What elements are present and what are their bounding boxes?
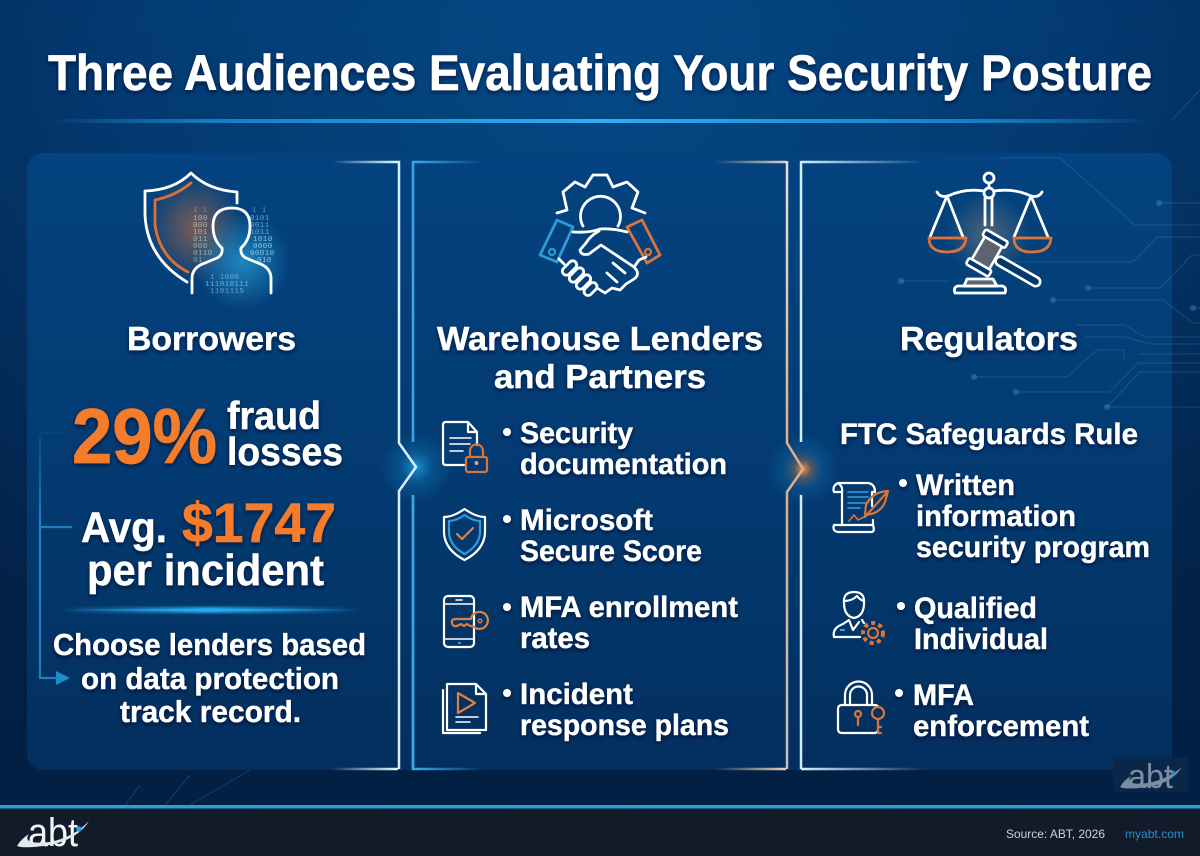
text: written information security program: Written — [916, 469, 1015, 502]
text: mfa enrollment rates — [503, 591, 738, 655]
text: mfa enforcement: enforcement — [913, 710, 1089, 743]
text: incident response plans — [503, 678, 729, 742]
flow connector arrow — [39, 433, 72, 685]
stat: average cost per incident: $1747 — [182, 491, 336, 554]
icon: shield and person with binary data: 0000 — [253, 243, 273, 251]
text: mfa enforcement: MFA — [913, 679, 974, 712]
icon: scroll and quill — [834, 483, 888, 532]
source credit: Source: ABT, 2026 — [1006, 828, 1105, 841]
panel frame: warehouse lenders — [413, 161, 803, 769]
panel: warehouse lenders and partners — [413, 161, 803, 769]
footer bar — [0, 805, 1200, 856]
item: mfa enforcement — [838, 679, 1089, 743]
text: security documentation: Security — [520, 417, 633, 450]
icon: shield and person with binary data: 111010111 — [205, 281, 249, 289]
panel: regulators — [801, 161, 1150, 769]
heading: borrowers: Borrowers — [127, 320, 296, 357]
panel frame: borrowers — [332, 161, 416, 769]
text: security documentation: documentation — [520, 448, 727, 481]
panel backdrop — [27, 153, 1172, 770]
text: written information security program — [899, 469, 1150, 564]
stat: average cost per incident: Avg. — [81, 504, 167, 552]
icon: person with gear — [834, 592, 883, 643]
item: incident response plans — [443, 678, 729, 742]
text: microsoft secure score: Microsoft — [520, 504, 653, 537]
icon: shield and person with binary data: 101 — [193, 229, 208, 237]
text: qualified individual: Qualified — [914, 592, 1037, 625]
text: incident response plans: response plans — [520, 709, 729, 742]
item: written information security program — [834, 469, 1150, 564]
icon: shield and person with binary data: 1 1 — [193, 207, 208, 215]
text: qualified individual — [897, 592, 1048, 656]
heading: warehouse lenders and partners: Warehouse Lenders — [437, 320, 763, 357]
item: mfa enrollment rates — [444, 591, 738, 655]
takeaway text — [53, 627, 366, 729]
subheading: ftc safeguards rule: FTC Safeguards Rule — [840, 418, 1138, 451]
icon: shield and person with binary data: 1011 — [250, 229, 270, 237]
icon: shield and person with binary data: 1 1000 — [210, 274, 240, 282]
icon: shield and person with binary data: 000 — [193, 243, 208, 251]
icon: shield and person with binary data: 0110 — [193, 250, 213, 258]
icon: gear and handshake — [540, 175, 660, 297]
stat divider — [58, 607, 362, 613]
icon: shield and person with binary data: 000 — [193, 222, 208, 230]
text: mfa enforcement — [895, 679, 1089, 743]
icon: shield and person with binary data: 00010 — [250, 250, 275, 258]
watermark logo: abt — [1128, 758, 1174, 796]
icon: shield and person with binary data: 011 — [193, 236, 208, 244]
stat: 29% fraud losses — [72, 392, 343, 480]
icon: phone with key — [444, 596, 488, 647]
item: security documentation — [443, 417, 727, 481]
stat: average cost per incident: per incident — [87, 546, 324, 595]
icon: shield and person with binary data: 0011 — [250, 222, 270, 230]
icon: shield and person with binary data: 100 — [193, 215, 208, 223]
text: incident response plans: Incident — [520, 678, 633, 711]
icon: shield and person with binary data: 01 — [193, 257, 203, 265]
stat: 29% fraud losses: losses — [227, 431, 343, 474]
icon: shield and person with binary data: 1 1 — [252, 207, 267, 215]
icon: document with lock — [443, 422, 487, 472]
takeaway text: Choose lenders based — [53, 627, 366, 662]
watermark logo — [1113, 757, 1188, 796]
icon: video document — [443, 684, 486, 733]
icon: padlock and key — [838, 682, 884, 733]
text: mfa enrollment rates: MFA enrollment — [520, 591, 738, 624]
heading: warehouse lenders and partners — [437, 320, 763, 395]
icon: shield with check — [444, 509, 485, 560]
icon: shield and person with binary data: 0101 — [250, 215, 270, 223]
text: written information security program: security program — [916, 531, 1150, 564]
takeaway text: track record. — [120, 694, 301, 729]
footer logo: abt — [28, 811, 78, 855]
stat: 29% fraud losses: 29% — [72, 392, 217, 480]
text: qualified individual: Individual — [914, 623, 1048, 656]
text: microsoft secure score: Secure Score — [520, 535, 702, 568]
icon: shield and person with binary data: 1101115 — [210, 288, 244, 296]
icon: shield and person with binary data: 010 — [257, 257, 272, 265]
icon: shield and person with binary data — [145, 173, 290, 310]
stat: 29% fraud losses: fraud — [227, 395, 321, 438]
text: microsoft secure score — [503, 504, 702, 568]
item: microsoft secure score — [444, 504, 702, 568]
takeaway text: on data protection — [81, 661, 339, 696]
heading: regulators: Regulators — [900, 320, 1078, 357]
stat: average cost per incident — [81, 491, 336, 595]
heading: warehouse lenders and partners: and Partners — [494, 358, 706, 395]
panel: borrowers — [39, 161, 416, 769]
circuit pattern, right side — [898, 158, 1200, 410]
item: qualified individual — [834, 592, 1048, 656]
chevron glows — [380, 431, 839, 505]
title divider — [50, 119, 1150, 123]
text: written information security program: information — [916, 500, 1076, 533]
panel frame: regulators — [801, 161, 925, 769]
icon: scales of justice and gavel — [929, 173, 1051, 301]
icon: shield and person with binary data: 1010 — [253, 236, 273, 244]
website link text: myabt.com — [1125, 828, 1184, 841]
text: security documentation — [503, 417, 727, 481]
text: mfa enrollment rates: rates — [520, 622, 590, 655]
